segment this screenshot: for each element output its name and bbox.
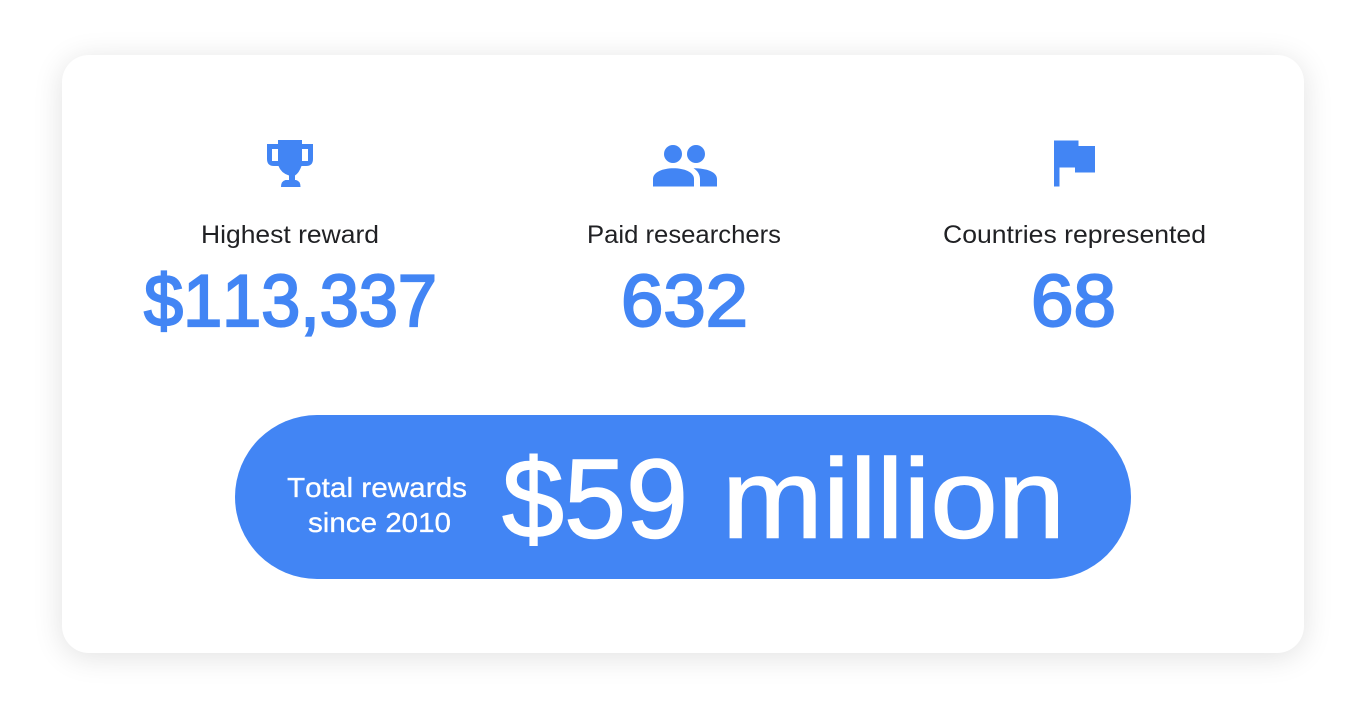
label: total rewards: Total rewards	[287, 472, 467, 503]
stat: highest reward value: $113,337	[144, 261, 437, 342]
callout: total rewards pill	[235, 415, 1131, 579]
heading: highest reward: Highest reward	[201, 221, 379, 249]
label: since 2010: since 2010	[308, 507, 451, 538]
icon: flag	[1054, 140, 1095, 186]
heading: countries represented: Countries represented	[943, 221, 1206, 249]
stat: countries value: 68	[1031, 261, 1116, 342]
heading: paid researchers: Paid researchers	[587, 221, 781, 249]
stat: dollar amount: $59	[502, 436, 688, 562]
stat: million: million	[722, 436, 1065, 562]
icon: trophy	[267, 140, 313, 187]
stat: paid researchers value: 632	[621, 261, 748, 342]
icon: people	[653, 145, 717, 186]
panel: white stats card	[62, 55, 1304, 653]
